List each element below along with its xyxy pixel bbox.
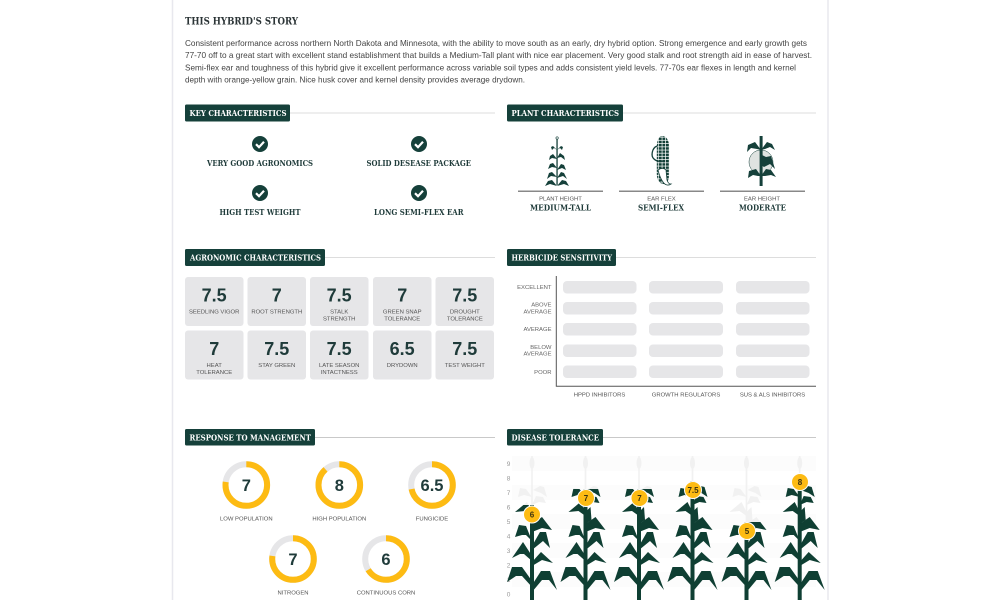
x-axis labels: GROWTH REGULATORS	[652, 392, 720, 398]
y-axis scale: 5	[507, 519, 511, 526]
check: long semi-flex ear	[374, 185, 464, 217]
ear height label: EAR HEIGHT	[744, 196, 780, 202]
donut: continuous corn: 6	[381, 551, 391, 569]
x-axis labels: SUS & ALS INHIBITORS	[740, 392, 805, 398]
tile: seedling vigor: SEEDLING VIGOR	[189, 310, 239, 316]
donut: low population: LOW POPULATION	[220, 516, 273, 522]
tile: green snap tolerance: GREEN SNAP	[383, 310, 422, 316]
tile: root strength: 7	[272, 286, 282, 306]
donut: continuous corn	[357, 538, 415, 596]
heading: response to management	[185, 429, 315, 446]
corn plant 4: score 7.5: 7.5	[687, 486, 699, 495]
tile: heat tolerance: TOLERANCE	[196, 370, 232, 376]
tile: test weight: 7.5	[452, 339, 477, 359]
panel: herbicide sensitivity	[507, 249, 816, 398]
donut: continuous corn: CONTINUOUS CORN	[357, 590, 415, 596]
corn plant 2: score 7: 7	[584, 494, 589, 503]
icon: plant height	[545, 137, 569, 186]
tile: late season intactness: 7.5	[327, 339, 352, 359]
tile: drought tolerance	[436, 277, 494, 326]
heading: response to management: RESPONSE TO MANAGEMENT	[190, 432, 312, 442]
page panel	[172, 0, 828, 600]
tile: stay green: STAY GREEN	[258, 363, 295, 369]
donut: high population: 8	[335, 477, 344, 495]
plant height label: PLANT HEIGHT	[539, 196, 582, 202]
y-axis labels: AVERAGE	[523, 327, 552, 333]
y-axis scale: 4	[507, 534, 511, 540]
tile: heat tolerance	[185, 330, 244, 380]
check: solid disease package	[366, 136, 471, 168]
y-axis scale: 9	[507, 461, 511, 468]
donut: fungicide: 6.5	[421, 477, 443, 495]
ear height label: MODERATE	[739, 202, 786, 212]
donut: high population: HIGH POPULATION	[312, 516, 366, 522]
ear flex label: SEMI-FLEX	[638, 202, 685, 212]
x-axis labels: HPPD INHIBITORS	[574, 392, 625, 398]
panel: plant characteristics	[507, 104, 816, 212]
check: high test weight: HIGH TEST WEIGHT	[220, 207, 301, 217]
tile: drydown: DRYDOWN	[387, 363, 418, 369]
y-axis labels: ABOVE	[531, 302, 552, 308]
icon: ear flex	[652, 136, 671, 185]
check: long semi-flex ear: LONG SEMI-FLEX EAR	[374, 207, 464, 217]
chart axes	[556, 276, 816, 386]
corn plant 2: score 7	[560, 456, 610, 600]
bars: hppd inhibitors	[563, 281, 636, 378]
corn plant 6: score 8	[775, 456, 825, 600]
check: very good agronomics: VERY GOOD AGRONOMICS	[206, 158, 313, 168]
tile: test weight: TEST WEIGHT	[445, 363, 485, 369]
y-axis labels	[517, 285, 552, 376]
story text	[185, 38, 812, 84]
x-axis labels	[574, 392, 805, 398]
panel: response to management	[185, 429, 495, 596]
heading: herbicide sensitivity: HERBICIDE SENSITIVITY	[512, 252, 613, 262]
tile: heat tolerance: 7	[209, 339, 219, 359]
y-axis labels: AVERAGE	[523, 352, 552, 358]
tile: green snap tolerance: TOLERANCE	[384, 316, 420, 322]
heading: key characteristics: KEY CHARACTERISTICS	[190, 108, 286, 118]
corn plant 5: score 5	[722, 456, 772, 600]
y-axis scale: 7	[507, 490, 511, 497]
tile: drought tolerance: DROUGHT	[450, 310, 480, 316]
panel: disease tolerance	[507, 429, 825, 600]
donut: high population	[312, 464, 366, 522]
title: THIS HYBRID'S STORY	[185, 16, 299, 28]
y-axis scale: 8	[507, 476, 511, 482]
tile: drydown	[373, 330, 432, 380]
panel: key characteristics	[185, 104, 495, 217]
heading: plant characteristics: PLANT CHARACTERISTICS	[512, 108, 619, 118]
plant height label: MEDIUM-TALL	[530, 202, 591, 212]
donut: low population	[220, 464, 273, 522]
heading: agronomic characteristics: AGRONOMIC CHARACTERISTICS	[189, 252, 321, 262]
corn plant 1: score 6	[507, 456, 557, 600]
tile: stalk strength: STRENGTH	[323, 316, 355, 322]
story text: depth with orange-yellow grain. Nice husk cover and kernel density provides average drydown.	[185, 74, 525, 84]
tile: stalk strength	[310, 277, 368, 326]
y-axis scale: 2	[507, 562, 511, 570]
check: high test weight	[220, 185, 301, 217]
tile: seedling vigor: 7.5	[202, 286, 227, 306]
heading: disease tolerance: DISEASE TOLERANCE	[512, 432, 599, 442]
tile: stay green: 7.5	[264, 339, 289, 359]
tile: drought tolerance: TOLERANCE	[447, 316, 483, 322]
bars: growth regulators	[649, 281, 723, 378]
tile: seedling vigor	[185, 277, 244, 326]
tile: late season intactness: LATE SEASON	[319, 363, 359, 369]
tile: test weight	[436, 330, 494, 380]
corn plant 5: score 5: 5	[745, 527, 750, 536]
bars: sus and als inhibitors	[736, 281, 810, 378]
donut: fungicide	[411, 464, 453, 522]
y-axis labels: POOR	[534, 370, 552, 376]
icon: ear height	[747, 136, 776, 186]
ear height label	[720, 190, 805, 212]
tile: green snap tolerance: 7	[397, 286, 407, 306]
ear flex label	[619, 190, 704, 212]
y-axis scale: 1	[507, 577, 511, 584]
donut: nitrogen	[272, 538, 314, 596]
check: very good agronomics	[206, 136, 313, 168]
y-axis scale	[507, 461, 511, 598]
donut: low population: 7	[242, 477, 251, 495]
tile: late season intactness	[310, 330, 368, 380]
ear flex label: EAR FLEX	[647, 196, 676, 202]
chart bands	[512, 456, 816, 587]
tile: drydown: 6.5	[390, 339, 415, 359]
heading: disease tolerance	[507, 429, 603, 446]
tile: green snap tolerance	[373, 277, 432, 326]
y-axis labels: BELOW	[530, 345, 552, 351]
y-axis labels: EXCELLENT	[517, 285, 552, 291]
tile: stalk strength: STALK	[330, 310, 348, 316]
donut: fungicide: FUNGICIDE	[416, 516, 448, 522]
tile: heat tolerance: HEAT	[207, 363, 222, 369]
y-axis scale: 3	[507, 548, 511, 555]
heading: plant characteristics	[507, 104, 623, 122]
heading: key characteristics	[185, 104, 290, 122]
corn plant 3: score 7	[614, 456, 664, 600]
tile: stalk strength: 7.5	[327, 286, 352, 306]
corn plant 3: score 7: 7	[637, 494, 642, 503]
tile: drought tolerance: 7.5	[452, 286, 477, 306]
heading: herbicide sensitivity	[507, 249, 616, 266]
donut: nitrogen: NITROGEN	[277, 590, 309, 596]
tile: late season intactness: INTACTNESS	[321, 370, 358, 376]
check: solid disease package: SOLID DESEASE PACKAGE	[366, 158, 471, 168]
corn plant 4: score 7.5	[668, 456, 718, 600]
donut: nitrogen: 7	[288, 551, 298, 569]
tile: root strength: ROOT STRENGTH	[251, 310, 302, 316]
y-axis scale: 0	[507, 592, 511, 598]
plant height label	[518, 190, 603, 212]
story text: Semi-flex ear and toughness of this hybrid give it excellent performance across variable soil types and adds consistent yield levels. 77-70s ear flexes in length and kernel	[185, 62, 796, 72]
story text: Consistent performance across northern North Dakota and Minnesota, with the ability to move south as an early, dry hybrid option. Strong emergence and early growth gets	[185, 38, 807, 48]
y-axis labels: AVERAGE	[523, 309, 552, 315]
y-axis scale: 6	[507, 504, 511, 512]
story text: 77-70 off to a great start with excellent stand establishment that builds a Medium-Tall plant with nice ear placement. Very good stalk and root strength aid in ease of harvest.	[185, 50, 812, 60]
corn plant 1: score 6: 6	[530, 510, 535, 520]
panel: agronomic characteristics	[185, 249, 495, 380]
tile: root strength	[248, 277, 306, 326]
tile: stay green	[248, 330, 306, 380]
corn plant 6: score 8: 8	[798, 478, 803, 487]
heading: agronomic characteristics	[185, 249, 325, 266]
